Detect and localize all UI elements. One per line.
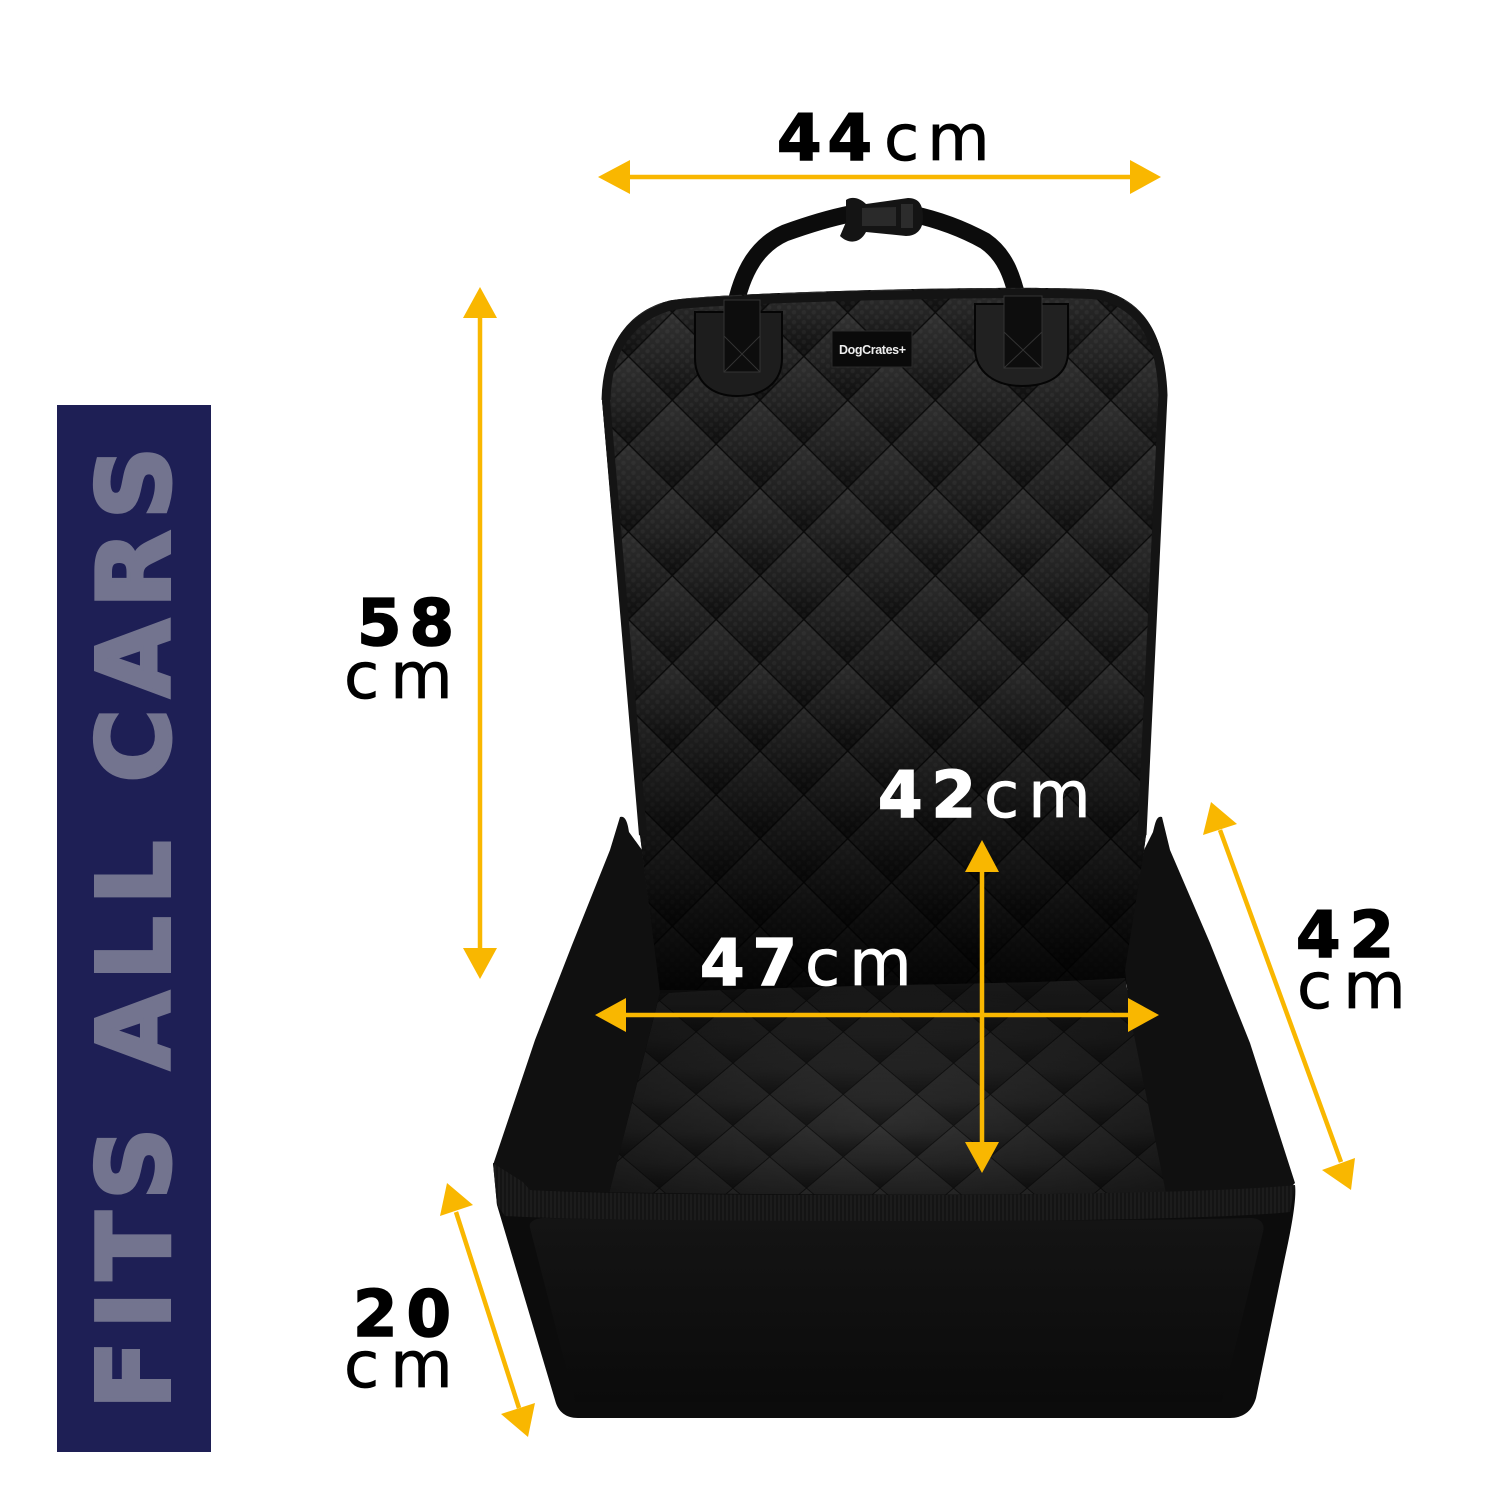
dimension: wall height 20cm [344, 1183, 535, 1437]
dimension: back height 58cm: cm [344, 640, 464, 714]
strap stitch right [1004, 296, 1042, 368]
carry handle with buckle [734, 198, 1018, 312]
dimension: side depth 42cm: 42 [1296, 899, 1403, 973]
seat back panel [590, 280, 1180, 1000]
dimension: back height 58cm: 58 [357, 587, 462, 661]
dimension: side depth 42cm: cm [1297, 950, 1417, 1024]
leather patch right [975, 304, 1068, 386]
dimension: back width 44cm [598, 102, 1161, 194]
dimension: side depth 42cm [1203, 802, 1417, 1190]
left side wall [493, 817, 660, 1198]
dimension: back height 58cm [344, 287, 497, 979]
product: folded car seat cover [493, 198, 1295, 1418]
leather patch left [695, 312, 782, 396]
dimension: wall height 20cm: cm [344, 1329, 464, 1403]
dimension: seat width 47cm: cm [805, 927, 921, 1001]
dimension: wall height 20cm: 20 [353, 1278, 460, 1352]
dimension: seat depth 42cm (inside) [878, 759, 1100, 1173]
right side wall [1125, 817, 1295, 1198]
dimension: seat depth 42cm (inside): cm [984, 759, 1100, 833]
brand label: DogCrates+ [839, 343, 906, 357]
banner heading text: FITS ALL CARS [76, 447, 193, 1409]
dimension: seat width 47cm: 47 [700, 927, 805, 1001]
brand label [832, 331, 912, 367]
seat floor [600, 978, 1175, 1200]
dimension: back width 44cm: cm [884, 102, 998, 176]
dimension: seat width 47cm [595, 927, 1159, 1032]
banner: fits all cars [57, 405, 211, 1452]
dimension: seat depth 42cm (inside): 42 [878, 759, 985, 833]
front wall [493, 1163, 1295, 1418]
strap stitch left [724, 300, 760, 372]
dimension: back width 44cm: 44 [777, 102, 878, 176]
